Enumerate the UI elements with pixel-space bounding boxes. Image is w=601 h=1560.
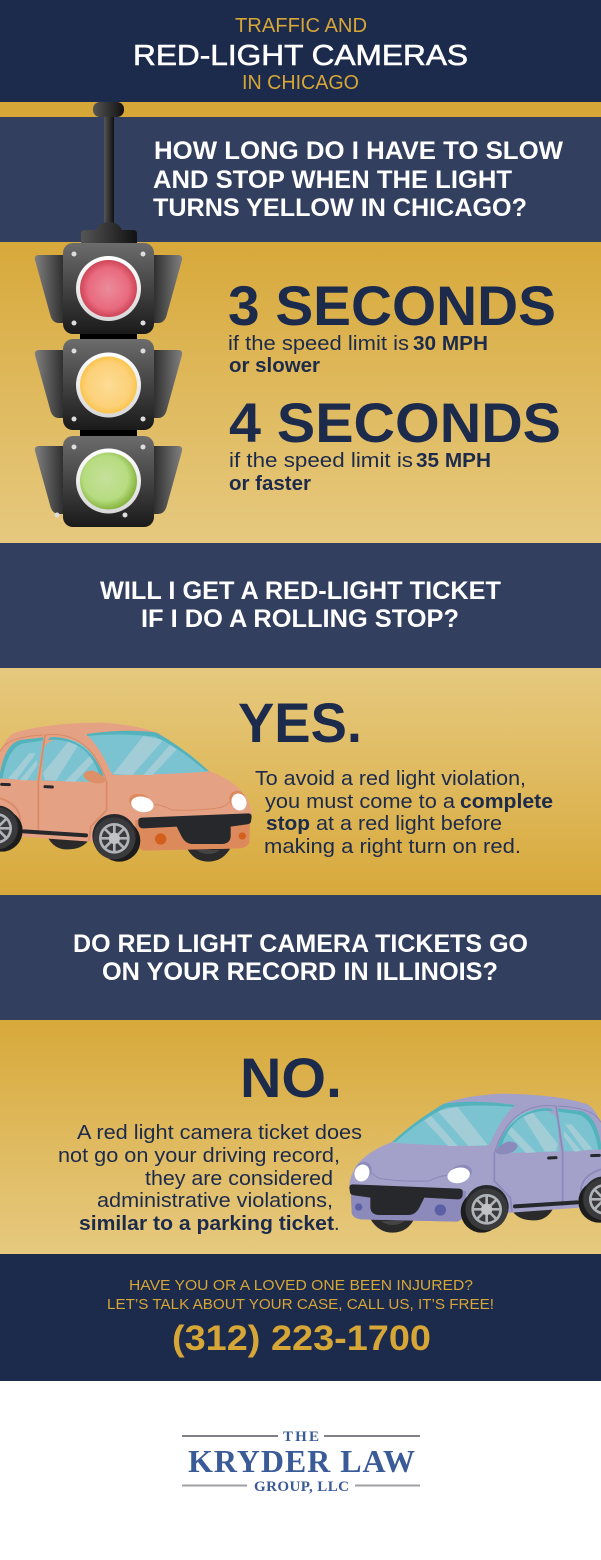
answer: 3 seconds <box>228 274 556 377</box>
answer: 4 seconds: 4 SECONDS <box>229 391 561 454</box>
question heading <box>153 137 563 222</box>
title: red-light cameras: RED-LIGHT CAMERAS <box>133 40 468 72</box>
answer text: making a right turn on red. <box>264 836 521 858</box>
logo: The Kryder Law Group: KRYDER LAW <box>188 1443 415 1479</box>
answer: 4 seconds: 35 MPH <box>416 450 491 472</box>
question heading: TURNS YELLOW IN CHICAGO? <box>153 194 527 222</box>
answer text <box>255 768 553 858</box>
illustration: orange car <box>0 723 252 862</box>
question heading: IF I DO A ROLLING STOP? <box>141 605 459 633</box>
answer text: at a red light before <box>316 813 502 835</box>
panel: yellow light answer <box>0 242 601 543</box>
answer text: not go on your driving record, <box>58 1145 340 1167</box>
question heading: WILL I GET A RED-LIGHT TICKET <box>100 577 501 605</box>
question heading <box>100 577 501 633</box>
signal head: yellow <box>35 339 182 430</box>
answer text: complete <box>460 791 553 813</box>
panel: header <box>0 0 601 117</box>
illustration: purple car <box>349 1094 601 1233</box>
answer text: stop <box>266 813 310 835</box>
answer: 4 seconds: or faster <box>229 473 311 495</box>
panel: question record <box>0 895 601 1020</box>
logo: The Kryder Law Group <box>182 1429 420 1495</box>
answer: 4 seconds: if the speed limit is <box>229 450 413 472</box>
logo: The Kryder Law Group: GROUP, LLC <box>254 1479 349 1495</box>
title: in chicago: IN CHICAGO <box>242 72 359 94</box>
call to action text: LET’S TALK ABOUT YOUR CASE, CALL US, IT’S FREE! <box>107 1296 494 1313</box>
question heading: ON YOUR RECORD IN ILLINOIS? <box>102 958 498 986</box>
signal head: red <box>35 243 182 334</box>
question heading: DO RED LIGHT CAMERA TICKETS GO <box>73 930 528 958</box>
answer text: A red light camera ticket does <box>77 1122 362 1144</box>
question heading: AND STOP WHEN THE LIGHT <box>153 166 512 194</box>
call to action text: HAVE YOU OR A LOVED ONE BEEN INJURED? <box>129 1277 473 1294</box>
panel: question rolling stop <box>0 543 601 668</box>
panel: rolling stop answer <box>0 668 601 895</box>
answer text: To avoid a red light violation, <box>255 768 526 790</box>
signal head: green <box>35 436 182 527</box>
title: traffic and: TRAFFIC AND <box>235 15 367 37</box>
answer: yes: YES. <box>238 691 362 754</box>
question heading <box>73 930 528 986</box>
answer text: you must come to a <box>265 791 456 813</box>
answer text: similar to a parking ticket <box>79 1213 334 1235</box>
panel: record answer <box>0 1020 601 1254</box>
answer: 3 seconds: 3 SECONDS <box>228 274 556 337</box>
answer: 3 seconds: if the speed limit is <box>228 333 409 355</box>
answer text: administrative violations, <box>97 1190 333 1212</box>
answer text <box>58 1122 362 1235</box>
answer: no: NO. <box>240 1046 342 1109</box>
call to action text <box>107 1277 494 1313</box>
icon: traffic light <box>35 102 182 527</box>
answer text: . <box>334 1213 340 1235</box>
answer: 3 seconds: or slower <box>229 355 320 377</box>
phone number: (312) 223-1700 <box>172 1319 431 1358</box>
answer text: they are considered <box>145 1168 333 1190</box>
panel: call to action <box>0 1254 601 1381</box>
answer: 3 seconds: 30 MPH <box>413 333 488 355</box>
answer: 4 seconds <box>229 391 561 495</box>
question heading: HOW LONG DO I HAVE TO SLOW <box>154 137 563 165</box>
logo: The Kryder Law Group: THE <box>283 1429 319 1445</box>
panel: question yellow light <box>0 117 601 242</box>
